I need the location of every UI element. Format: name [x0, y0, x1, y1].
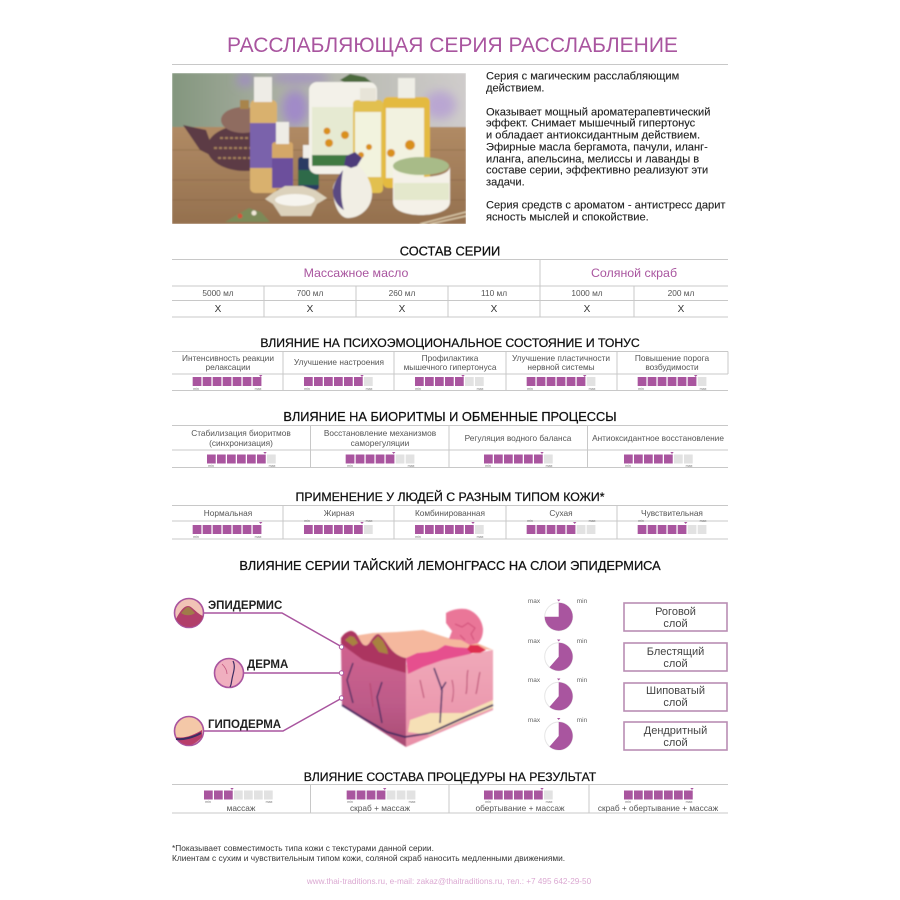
box: stratum dendriticum: Дендритный — [644, 725, 707, 737]
heading: series composition: СОСТАВ СЕРИИ — [400, 244, 500, 258]
table: series composition: 110 мл — [481, 288, 507, 298]
rating: dry skin: max — [589, 519, 596, 523]
rating: antioxidant recovery: Антиоксидантное восстановление — [592, 433, 724, 443]
rating: normal skin: min — [193, 535, 199, 539]
rating: hypertonus prevention — [404, 353, 497, 391]
panel: procedure ratings — [172, 784, 728, 813]
rating: massage: max — [266, 800, 273, 804]
table: series composition: 700 мл — [297, 288, 324, 298]
rating: massage: min — [205, 800, 211, 804]
rating: scrub, wrap and massage: max — [686, 800, 693, 804]
description text: Серия с магическим расслабляющим — [486, 70, 679, 82]
connector end dots — [339, 645, 344, 700]
pie: stratum dendriticum: max — [528, 717, 541, 724]
rating: scrub and massage: скраб + массаж — [350, 803, 410, 813]
pie: stratum corneum: min — [577, 598, 588, 605]
table: series composition: 200 мл — [668, 288, 695, 298]
description text: иланга, апельсина, мелиссы и лаванды в — [486, 154, 699, 166]
rating: combination skin: min — [415, 535, 421, 539]
pie: stratum lucidum: min — [577, 638, 588, 645]
rating: antioxidant recovery: min — [625, 464, 631, 468]
table: series composition: X — [307, 304, 314, 315]
rating: mood improvement — [294, 357, 384, 391]
pie: stratum corneum: max — [528, 598, 541, 605]
rating: oily skin: Жирная — [324, 508, 354, 518]
rating: normal skin: Нормальная — [204, 508, 252, 518]
rating: biorhythm stabilisation: max — [269, 464, 276, 468]
rating: sensitive skin: Чувствительная — [641, 508, 703, 518]
description text: задачи. — [486, 176, 525, 188]
description text: и обладает антиоксидантным действием. — [486, 130, 700, 142]
table: series composition: X — [678, 304, 685, 315]
rating: combination skin: max — [477, 535, 484, 539]
title: РАССЛАБЛЯЮЩАЯ СЕРИЯ РАССЛАБЛЕНИЕ — [227, 34, 678, 57]
icon: dermis circle — [214, 658, 244, 688]
rating: hypertonus prevention: max — [477, 387, 484, 391]
box: stratum spinosum: Шиповатый — [646, 685, 705, 697]
rating: wrap and massage: обертывание + массаж — [475, 803, 565, 813]
description text: эффект. Снимает мышечный гипертонус — [486, 118, 696, 130]
box: stratum lucidum: слой — [663, 658, 688, 670]
rating: scrub, wrap and massage — [598, 788, 719, 813]
box: stratum spinosum — [624, 683, 727, 711]
rating: biorhythm stabilisation: min — [208, 464, 214, 468]
rating: dry skin — [527, 508, 597, 530]
rating: self-regulation: min — [347, 464, 353, 468]
heading: psycho-emotional state: ВЛИЯНИЕ НА ПСИХОЭМОЦИОНАЛЬНОЕ СОСТОЯНИЕ И ТОНУС — [260, 336, 640, 350]
panel: psycho-emotional ratings — [172, 352, 728, 391]
pie: stratum dendriticum — [528, 717, 588, 750]
description text: составе серии, эффективно реализуют эти — [486, 164, 708, 176]
icon: hypodermis circle — [174, 716, 204, 746]
footnote: *Показывает совместимость типа кожи с текстурами данной серии. — [172, 843, 434, 853]
heading: biorhythms: ВЛИЯНИЕ НА БИОРИТМЫ И ОБМЕННЫЕ ПРОЦЕССЫ — [283, 409, 617, 424]
rating: biorhythm stabilisation: Стабилизация биоритмов — [191, 428, 291, 438]
rating: wrap and massage: min — [485, 800, 491, 804]
description text: ясность мыслей и спокойствие. — [486, 212, 649, 224]
rating: water balance: Регуляция водного баланса — [465, 433, 572, 443]
pie: stratum dendriticum: min — [577, 717, 588, 724]
table: series composition: X — [215, 304, 222, 315]
panel: skin type ratings — [172, 506, 728, 539]
rating: relaxation intensity: min — [193, 387, 199, 391]
rating: combination skin: Комбинированная — [415, 508, 485, 518]
table: series composition: 5000 мл — [202, 288, 234, 298]
photo: product range on wooden table — [172, 73, 466, 224]
rating: biorhythm stabilisation — [191, 428, 291, 468]
heading: skin types: ПРИМЕНЕНИЕ У ЛЮДЕЙ С РАЗНЫМ ТИПОМ КОЖИ* — [295, 489, 605, 504]
rating: dry skin: min — [527, 519, 533, 523]
rating: hypertonus prevention: мышечного гипертонуса — [404, 362, 497, 372]
rating: nervous system plasticity: Улучшение пластичности — [512, 353, 610, 363]
box: stratum corneum — [624, 603, 727, 631]
rating: nervous system plasticity: max — [589, 387, 596, 391]
rating: self-regulation: max — [408, 464, 415, 468]
rating: combination skin — [415, 508, 485, 539]
pie: stratum corneum — [528, 598, 588, 631]
description text: Серия средств с ароматом - антистресс дарит — [486, 200, 725, 212]
description text: Оказывает мощный ароматерапевтический — [486, 106, 710, 118]
table: series composition: X — [491, 304, 498, 315]
rating: water balance — [465, 433, 572, 468]
rating: self-regulation: саморегуляции — [351, 438, 410, 448]
panel: biorhythm ratings — [172, 426, 728, 468]
pie: stratum spinosum: min — [577, 677, 588, 684]
rating: wrap and massage — [475, 788, 565, 813]
rating: excitability threshold — [635, 353, 709, 391]
rating: water balance: min — [485, 464, 491, 468]
rating: antioxidant recovery: max — [686, 464, 693, 468]
pie: stratum spinosum: max — [528, 677, 541, 684]
box: stratum dendriticum: слой — [663, 737, 688, 749]
rating: scrub, wrap and massage: скраб + обертывание + массаж — [598, 803, 719, 813]
box: stratum corneum: Роговой — [655, 606, 696, 618]
rating: relaxation intensity: max — [255, 387, 262, 391]
rating: dry skin: Сухая — [549, 508, 573, 518]
skin cross-section illustration — [341, 609, 493, 747]
icon: epidermis circle — [174, 598, 204, 628]
box: stratum lucidum — [624, 643, 727, 671]
table: series composition: X — [399, 304, 406, 315]
rating: scrub, wrap and massage: min — [625, 800, 631, 804]
rating: oily skin: min — [304, 519, 310, 523]
rating: biorhythm stabilisation: (синхронизация) — [209, 438, 273, 448]
rating: excitability threshold: Повышение порога — [635, 353, 709, 363]
rating: normal skin: max — [255, 535, 262, 539]
table: series composition: Соляной скраб — [591, 266, 677, 280]
box: stratum dendriticum — [624, 722, 727, 750]
rating: self-regulation: Восстановление механизмов — [324, 428, 437, 438]
box: stratum spinosum: слой — [663, 697, 688, 709]
pie: stratum spinosum — [528, 677, 588, 710]
connector lines — [203, 613, 342, 731]
rating: sensitive skin: min — [638, 519, 644, 523]
rating: oily skin — [304, 508, 374, 530]
box: stratum lucidum: Блестящий — [647, 646, 704, 658]
pie: stratum lucidum: max — [528, 638, 541, 645]
rating: massage — [204, 788, 274, 813]
label: epidermis: ЭПИДЕРМИС — [208, 600, 282, 612]
box: stratum corneum: слой — [663, 618, 688, 630]
contacts: www.thai-traditions.ru, e-mail: zakaz@thaitraditions.ru, тел.: +7 495 642-29-50 — [306, 877, 592, 886]
footnote: Клиентам с сухим и чувствительным типом кожи, соляной скраб наносить медленными движениями. — [172, 853, 565, 863]
pie: stratum lucidum — [528, 638, 588, 671]
rating: mood improvement: min — [304, 387, 310, 391]
table: series composition — [172, 260, 728, 317]
rating: sensitive skin — [638, 508, 708, 530]
description text — [486, 70, 725, 224]
rating: oily skin: max — [366, 519, 373, 523]
rating: antioxidant recovery — [592, 433, 724, 468]
table: series composition: X — [584, 304, 591, 315]
label: dermis: ДЕРМА — [247, 659, 288, 671]
rating: excitability threshold: max — [700, 387, 707, 391]
heading: epidermis layers: ВЛИЯНИЕ СЕРИИ ТАЙСКИЙ ЛЕМОНГРАСС НА СЛОИ ЭПИДЕРМИСА — [239, 558, 661, 573]
table: series composition: 260 мл — [389, 288, 416, 298]
rating: normal skin — [193, 508, 263, 539]
rating: relaxation intensity — [182, 353, 274, 391]
rating: nervous system plasticity: нервной системы — [527, 362, 595, 372]
rating: relaxation intensity: Интенсивность реакции — [182, 353, 274, 363]
table: series composition: 1000 мл — [571, 288, 603, 298]
rating: self-regulation — [324, 428, 437, 468]
rating: excitability threshold: возбудимости — [645, 362, 699, 372]
rating: mood improvement: max — [366, 387, 373, 391]
rating: wrap and massage: max — [546, 800, 553, 804]
rating: water balance: max — [546, 464, 553, 468]
rating: hypertonus prevention: Профилактика — [422, 353, 479, 363]
rating: relaxation intensity: релаксации — [206, 362, 251, 372]
rating: nervous system plasticity — [512, 353, 610, 391]
rating: massage: массаж — [227, 803, 256, 813]
rating: nervous system plasticity: min — [527, 387, 533, 391]
label: hypodermis: ГИПОДЕРМА — [208, 719, 281, 731]
description text: Эфирные масла бергамота, пачули, иланг- — [486, 142, 708, 154]
rating: mood improvement: Улучшение настроения — [294, 357, 384, 367]
rating: scrub and massage: min — [347, 800, 353, 804]
heading: procedure composition: ВЛИЯНИЕ СОСТАВА ПРОЦЕДУРЫ НА РЕЗУЛЬТАТ — [304, 770, 597, 784]
table: series composition: Массажное масло — [304, 266, 409, 280]
rating: sensitive skin: max — [700, 519, 707, 523]
rating: hypertonus prevention: min — [415, 387, 421, 391]
description text: действием. — [486, 82, 544, 94]
rating: excitability threshold: min — [638, 387, 644, 391]
rating: scrub and massage: max — [409, 800, 416, 804]
footnote — [172, 843, 565, 863]
rating: scrub and massage — [347, 788, 417, 813]
